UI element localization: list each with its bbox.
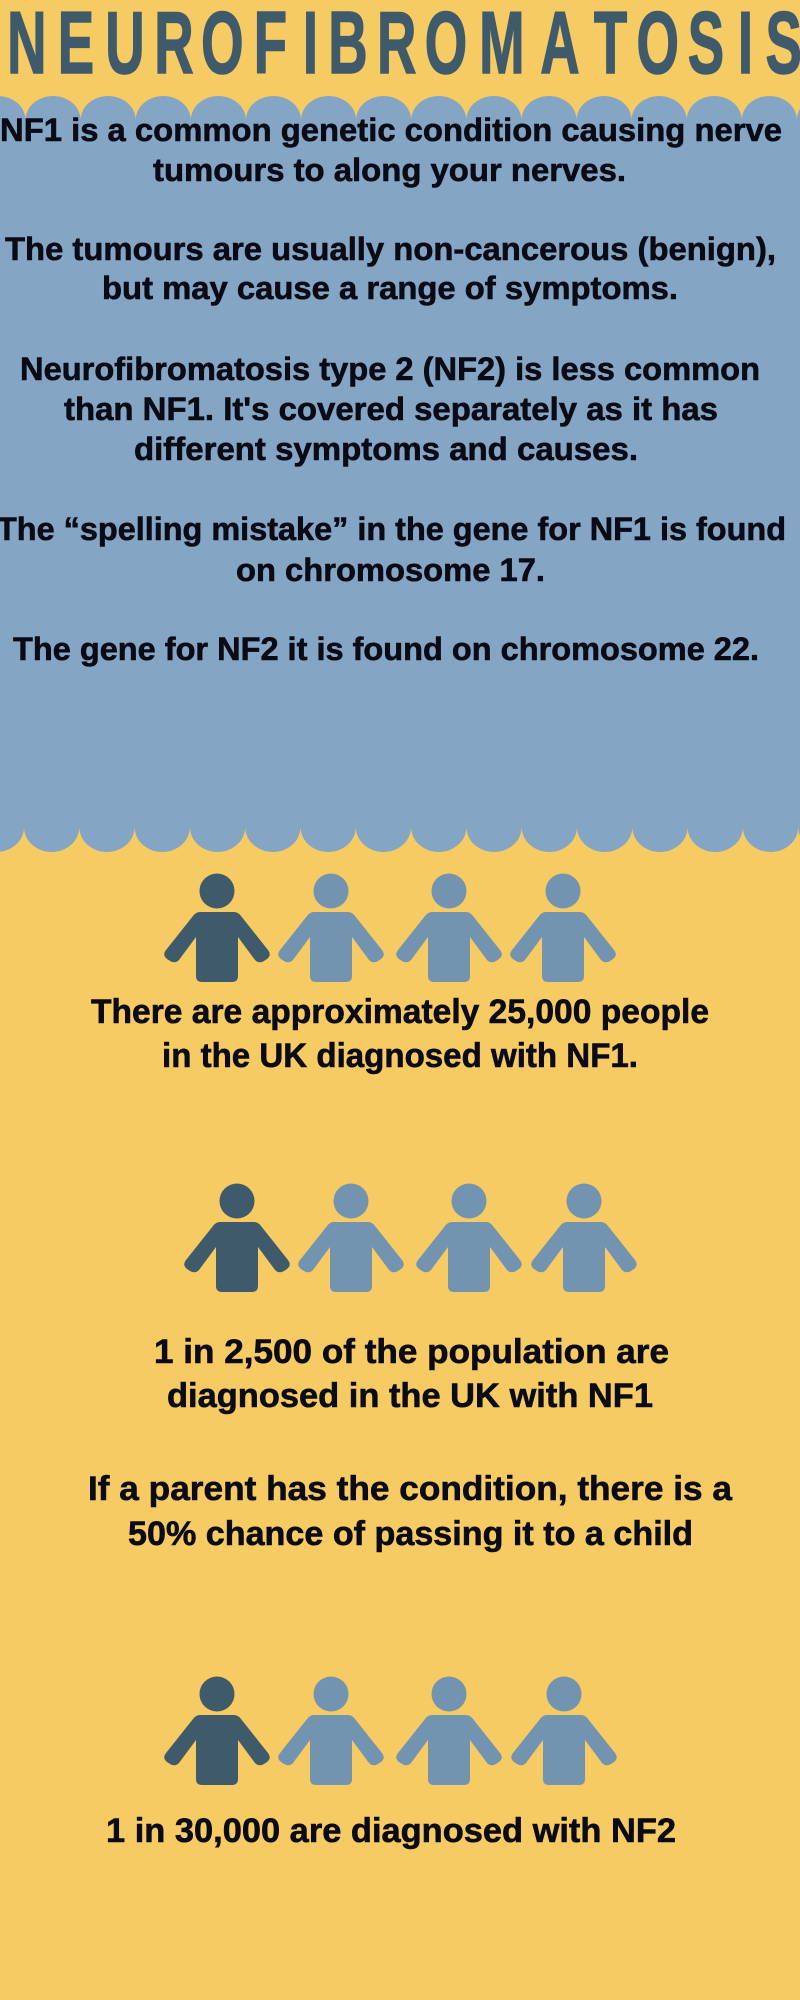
text block: inheritance chance: 50% chance of passing it to a child <box>128 1515 693 1553</box>
icon: person <box>416 1184 522 1292</box>
text block: 1 in 2,500: 1 in 2,500 of the population are <box>154 1333 669 1371</box>
text block: chromosome 17 <box>0 511 786 588</box>
text block: NF1 introduction: NF1 is a common genetic condition causing nerve <box>0 112 782 148</box>
text block: chromosome 17: on chromosome 17. <box>236 552 545 588</box>
icon: person <box>510 874 616 982</box>
text block: inheritance chance: If a parent has the condition, there is a <box>88 1470 733 1508</box>
text block: benign tumours: The tumours are usually non-cancerous (benign), <box>5 231 776 267</box>
text block: 1 in 2,500 <box>154 1333 669 1415</box>
icon: row of four people, 1 in 2,500 <box>184 1184 637 1292</box>
icon: person <box>511 1676 617 1785</box>
icon: person <box>531 1184 637 1292</box>
text block: 1 in 30,000: 1 in 30,000 are diagnosed with NF2 <box>106 1812 676 1850</box>
text block: NF2 explanation: Neurofibromatosis type 2 (NF2) is less common <box>20 351 760 387</box>
text block: 25,000 diagnosed <box>91 993 709 1075</box>
text block: chromosome 17: The “spelling mistake” in the gene for NF1 is found <box>0 511 786 547</box>
text block: NF2 explanation <box>20 351 760 467</box>
text block: 1 in 2,500: diagnosed in the UK with NF1 <box>167 1377 653 1415</box>
text block: NF1 introduction <box>0 112 782 188</box>
text block: 25,000 diagnosed: There are approximately 25,000 people <box>91 993 709 1031</box>
icon: highlighted person <box>184 1184 290 1292</box>
text block: chromosome 22: The gene for NF2 it is found on chromosome 22. <box>13 631 759 667</box>
icon: person <box>278 874 384 982</box>
icon: row of four people, 1 in 30,000 <box>164 1676 617 1785</box>
icon: row of four people, 25,000 <box>164 874 616 982</box>
panel: blue scalloped background <box>0 96 800 852</box>
text block: inheritance chance <box>88 1470 733 1553</box>
icon: person <box>298 1184 404 1292</box>
text block: NF1 introduction: tumours to along your nerves. <box>153 152 626 188</box>
icon: highlighted person <box>164 874 270 982</box>
text block: NF2 explanation: different symptoms and causes. <box>134 431 638 467</box>
icon: person <box>278 1676 384 1785</box>
text block: benign tumours <box>5 231 776 306</box>
text block: benign tumours: but may cause a range of symptoms. <box>102 270 678 306</box>
icon: person <box>396 1676 502 1785</box>
icon: person <box>396 874 502 982</box>
icon: highlighted person <box>164 1676 270 1785</box>
text block: 25,000 diagnosed: in the UK diagnosed with NF1. <box>162 1037 638 1075</box>
text block: NF2 explanation: than NF1. It's covered separately as it has <box>64 391 718 427</box>
